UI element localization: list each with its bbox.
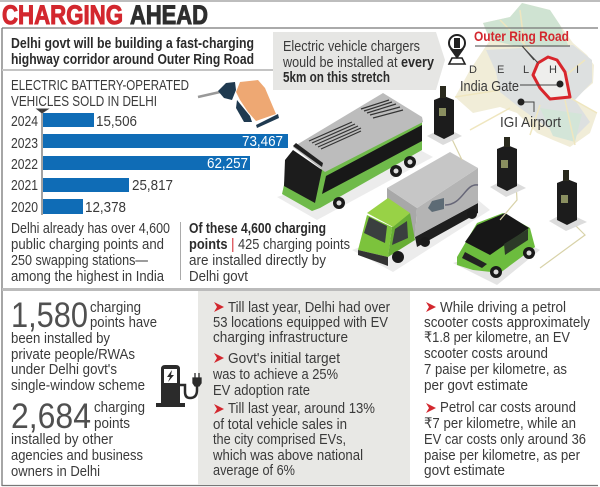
- icon: hand with key: [198, 80, 279, 128]
- bar chart: 2020: [11, 200, 38, 216]
- map labels: [460, 28, 579, 131]
- bar chart: 73,467: [242, 134, 283, 150]
- map labels: Outer Ring Road: [474, 28, 569, 44]
- headline: Delhi govt will be building a fast-charging: [11, 36, 254, 52]
- map labels: D: [469, 64, 477, 76]
- panel: running costs: ₹7 per kilometre, while an: [424, 416, 576, 432]
- illustration: truck: [352, 152, 490, 272]
- illustration: bus: [277, 93, 433, 220]
- bar chart: 2021: [11, 178, 38, 194]
- panel: running costs: While driving a petrol: [440, 300, 566, 316]
- chart title: [11, 78, 189, 110]
- panel: running costs: govt estimate: [424, 463, 505, 479]
- panel: charging points counts: points have: [90, 315, 157, 331]
- panel: Delhi EV statistics: the city comprised EVs,: [213, 432, 346, 448]
- map labels: I: [576, 64, 579, 76]
- text: public charging points: 250 swapping stations—: [11, 253, 148, 269]
- callout: Electric vehicle chargers: [283, 39, 420, 55]
- map labels: L: [523, 64, 529, 76]
- panel: charging points counts: installed by other: [11, 432, 113, 448]
- map labels: E: [497, 64, 504, 76]
- panel: running costs: per govt estimate: [424, 378, 528, 394]
- panel: Delhi EV statistics: 53 locations equipped with EV: [213, 315, 388, 331]
- bar chart: 25,817: [132, 178, 173, 194]
- bar chart: 2023: [11, 136, 38, 152]
- panel: Delhi EV statistics: was to achieve a 25%: [212, 367, 338, 383]
- text: installed by Delhi govt: points | 425 charging points: [189, 237, 350, 253]
- panel: charging points counts: points: [94, 416, 130, 432]
- bar chart: 62,257: [207, 156, 248, 172]
- bar chart: 2022: [11, 157, 38, 173]
- panel: charging points counts: single-window scheme: [11, 378, 145, 394]
- panel: charging points counts: agencies and business: [11, 448, 143, 464]
- panel: running costs: Petrol car costs around: [440, 400, 576, 416]
- headline: [11, 36, 254, 68]
- bar chart: [11, 109, 288, 216]
- panel: Delhi EV statistics: EV adoption rate: [213, 383, 310, 399]
- panel: Delhi EV statistics: Till last year, around 13%: [228, 401, 375, 417]
- panel: Delhi EV statistics: of total vehicle sales in: [213, 417, 347, 433]
- text: installed by Delhi govt: [189, 221, 350, 285]
- panel: running costs: ₹1.8 per kilometre, an EV: [424, 330, 570, 346]
- text: installed by Delhi govt: are installed directly by: [189, 253, 327, 269]
- map labels: IGI Airport: [500, 115, 561, 131]
- icon: EV charger: [156, 365, 201, 407]
- panel: running costs: 7 paise per kilometre, as: [424, 362, 567, 378]
- icon: charging pin: [449, 35, 465, 64]
- panel: running costs: scooter costs around: [424, 346, 548, 362]
- text: installed by Delhi govt: Of these 4,600 charging: [189, 221, 326, 237]
- callout: [273, 32, 445, 90]
- panel: running costs: scooter costs approximately: [424, 315, 591, 331]
- panel: Delhi EV statistics: [212, 300, 390, 479]
- text: public charging points: Delhi already has over 4,600: [11, 221, 170, 237]
- title: CHARGING: [2, 0, 123, 30]
- map: Delhi: [455, 3, 597, 147]
- panel: Delhi EV statistics: which was above national: [212, 448, 363, 464]
- panel: running costs: [424, 300, 591, 479]
- panel: charging points counts: 2,684: [11, 397, 91, 436]
- panel: running costs: EV car costs only around 36: [424, 432, 586, 448]
- panel: charging points counts: charging: [94, 400, 145, 416]
- panel: Delhi EV statistics: Govt's initial target: [228, 351, 340, 367]
- panel: charging points counts: 1,580: [11, 296, 88, 335]
- panel: running costs: paise per kilometre, as per: [424, 448, 580, 464]
- panel: charging points counts: charging: [90, 300, 141, 316]
- panel: Delhi EV statistics: average of 6%: [213, 463, 295, 479]
- illustration: car: [453, 213, 540, 285]
- panel: charging points counts: private people/RWAs: [11, 347, 135, 363]
- bar chart: 15,506: [96, 114, 137, 130]
- illustration: chargers with cables: [427, 86, 587, 268]
- map labels: India Gate: [460, 79, 519, 95]
- panel: charging points counts: been installed by: [11, 331, 111, 347]
- chart title: VEHICLES SOLD IN DELHI: [11, 94, 157, 110]
- callout: 5km on this stretch: [283, 70, 390, 86]
- text: public charging points: public charging points and: [11, 237, 164, 253]
- ring road: [533, 57, 570, 99]
- bar chart: 2024: [11, 114, 38, 130]
- map labels: H: [549, 64, 557, 76]
- panel: charging points counts: owners in Delhi: [11, 464, 100, 480]
- text: public charging points: [11, 221, 170, 285]
- panel: Delhi EV statistics: charging infrastructure: [213, 330, 348, 346]
- title: AHEAD: [130, 0, 208, 30]
- chart title: ELECTRIC BATTERY-OPERATED: [11, 78, 189, 94]
- text: public charging points: among the highest in India: [11, 269, 165, 285]
- panel: Delhi EV statistics: Till last year, Delhi had over: [228, 300, 390, 316]
- panel: charging points counts: under Delhi govt's: [11, 362, 117, 378]
- panel: middle background: [198, 291, 410, 485]
- bar chart: 12,378: [85, 200, 126, 216]
- text: installed by Delhi govt: Delhi govt: [189, 269, 248, 285]
- panel: charging points counts: [11, 296, 157, 480]
- callout: would be installed at every: [282, 55, 434, 71]
- headline: highway corridor around Outer Ring Road: [11, 52, 254, 68]
